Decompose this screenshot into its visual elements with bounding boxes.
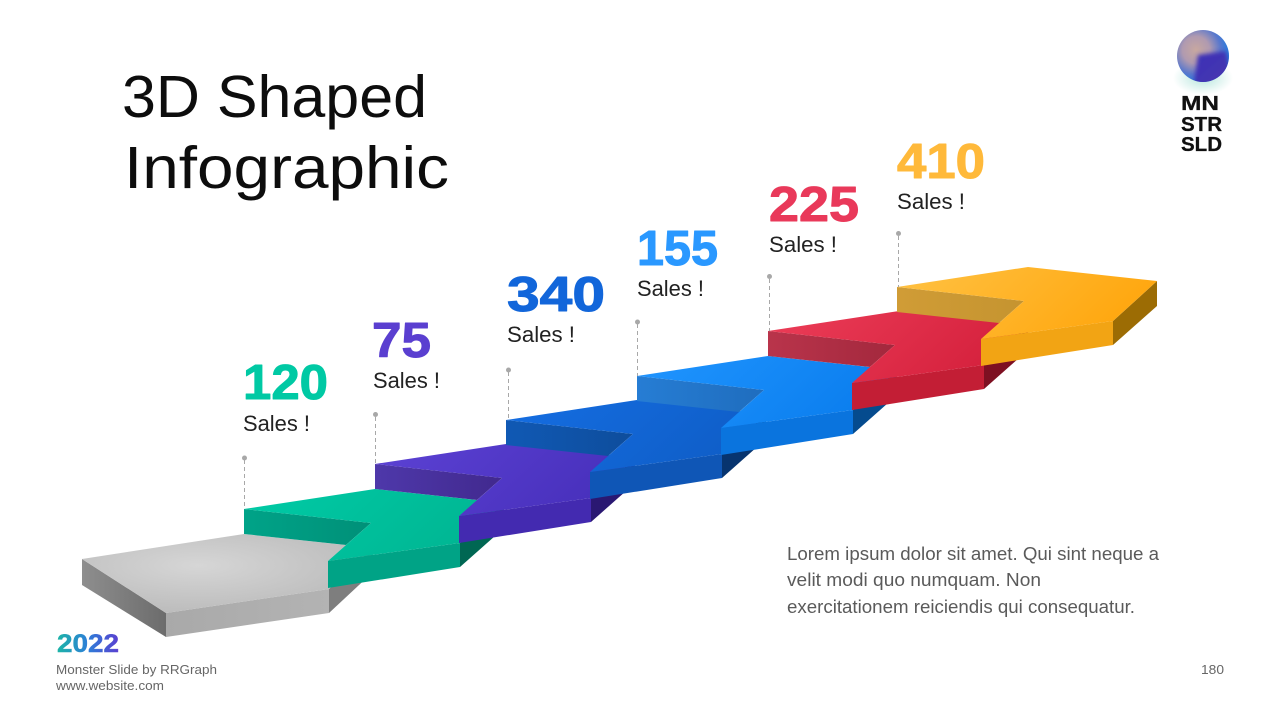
- label: 75 sales: Sales !: [373, 368, 440, 393]
- step: sky blue 155: [637, 356, 897, 455]
- description text: velit modi quo numquam. Non: [787, 569, 1041, 590]
- logo wordmark: MN: [1181, 93, 1219, 115]
- year: 2022: [57, 630, 119, 658]
- logo wordmark: SLD: [1181, 134, 1222, 156]
- label: 225 sales: Sales !: [769, 232, 837, 257]
- label: 340 sales: Sales !: [507, 322, 575, 347]
- description text: exercitationem reiciendis qui consequatur.: [787, 596, 1135, 617]
- label: 340 sales: 340: [507, 268, 605, 322]
- page number: 180: [1201, 662, 1224, 677]
- label: 410 sales: [896, 135, 985, 287]
- 3D staircase chart: [82, 267, 1157, 637]
- step: blue 340: [506, 400, 766, 499]
- label: 340 sales: [506, 268, 605, 420]
- logo wordmark: STR: [1181, 114, 1223, 136]
- step: gray base: [82, 534, 373, 637]
- footer credits: www.website.com: [55, 678, 164, 693]
- label: 75 sales: [372, 314, 440, 464]
- logo: [1176, 30, 1230, 152]
- step: gold 410: [897, 267, 1157, 366]
- logo wordmark: [1181, 93, 1223, 156]
- icon: gradient sphere: [1176, 30, 1230, 93]
- label: 225 sales: 225: [769, 178, 859, 232]
- title: 3D Shaped: [122, 64, 427, 130]
- description text: [787, 543, 1160, 617]
- footer credits: [55, 662, 217, 693]
- title: Infographic: [124, 135, 449, 201]
- footer credits: Monster Slide by RRGraph: [56, 662, 217, 677]
- label: 410 sales: 410: [897, 135, 985, 189]
- label: 155 sales: Sales !: [637, 276, 704, 301]
- description text: Lorem ipsum dolor sit amet. Qui sint neque a: [787, 543, 1160, 564]
- title: [122, 64, 449, 201]
- step: red 225: [768, 311, 1028, 410]
- label: 155 sales: 155: [637, 222, 718, 276]
- step: purple 75: [375, 444, 635, 543]
- label: 410 sales: Sales !: [897, 189, 965, 214]
- label: 155 sales: [635, 222, 718, 376]
- step: green 120: [244, 489, 504, 588]
- label: 120 sales: [242, 356, 328, 509]
- label: 75 sales: 75: [372, 314, 431, 368]
- label: 225 sales: [767, 178, 859, 331]
- label: 120 sales: Sales !: [243, 411, 310, 436]
- label: 120 sales: 120: [243, 356, 328, 410]
